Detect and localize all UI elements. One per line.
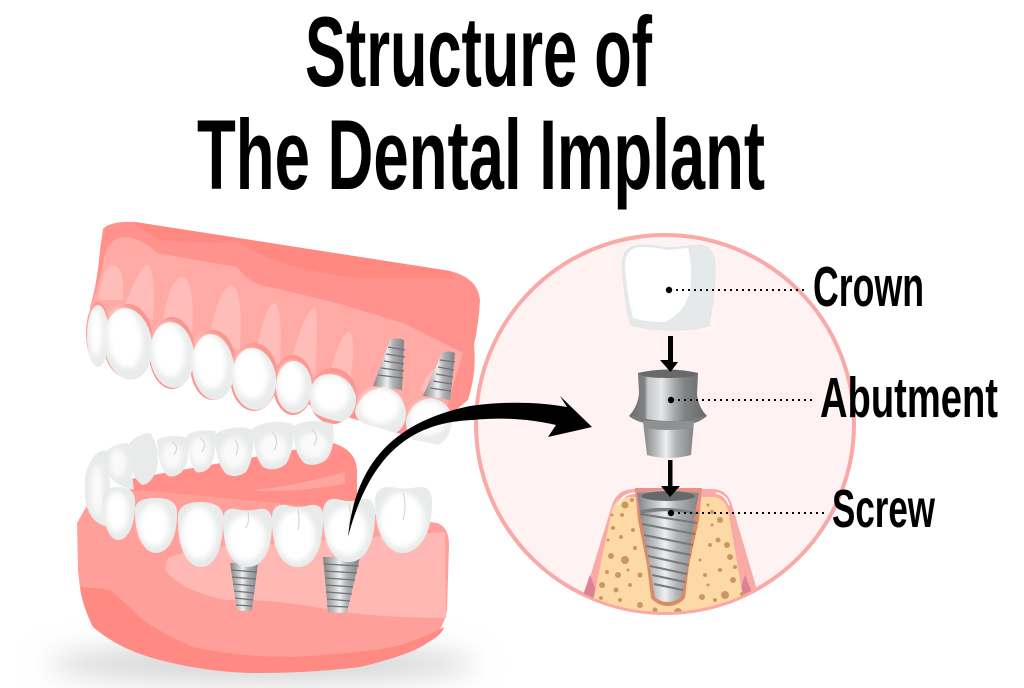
abutment [629, 370, 707, 458]
lower molar grooves [172, 430, 405, 530]
lower implants [230, 557, 360, 613]
magnified circle [476, 235, 854, 620]
lower denture [77, 421, 449, 673]
lower back teeth [85, 421, 334, 527]
upper gum root bumps [98, 265, 449, 400]
upper implants [373, 338, 455, 400]
label: screw [668, 479, 936, 539]
curved arrow [348, 396, 592, 537]
upper teeth [87, 305, 452, 445]
bone section [583, 488, 760, 620]
label: abutment [668, 366, 998, 430]
lower gum back [125, 443, 357, 510]
shadow under the jaw [47, 646, 477, 682]
upper gum margins [86, 302, 357, 424]
label: screw: Screw [832, 479, 936, 539]
screw [637, 490, 699, 602]
assembly arrows [660, 336, 680, 497]
crown [622, 245, 715, 330]
upper denture [86, 222, 480, 445]
lower gum base [77, 490, 449, 673]
upper gum [90, 222, 480, 440]
bone spots [599, 498, 744, 616]
title [197, 0, 765, 210]
lower front teeth [103, 487, 432, 567]
label: crown [666, 255, 924, 319]
label: crown: Crown [813, 255, 924, 319]
